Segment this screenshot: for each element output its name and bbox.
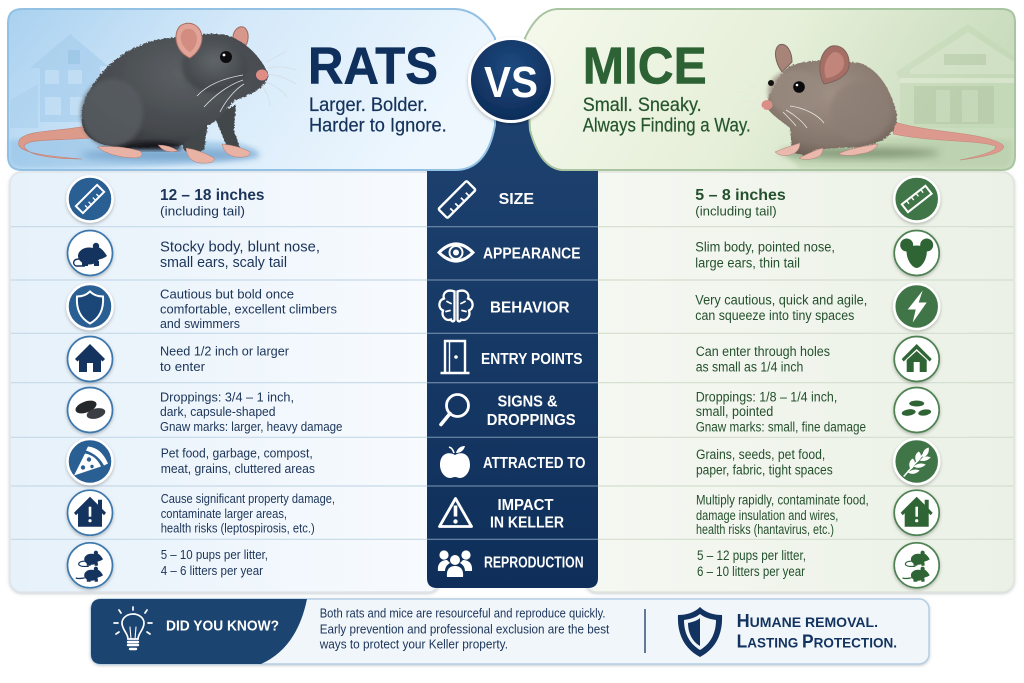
mouse tail <box>893 122 1004 160</box>
mice row text: entry points: as small as 1/4 inch <box>696 360 803 375</box>
mouse whiskers <box>730 81 824 128</box>
rats row text: appearance: small ears, scaly tail <box>160 255 287 271</box>
rats row text: attracted to: meat, grains, cluttered areas <box>161 461 315 476</box>
mice row text: droppings: small, pointed <box>696 404 773 419</box>
rats row text: attracted to: Pet food, garbage, compost, <box>161 446 313 461</box>
icon: house badge mice <box>894 336 939 382</box>
rats title: RATS <box>308 38 438 96</box>
icon: lightning badge <box>894 284 939 329</box>
mice row text: behavior <box>695 292 867 323</box>
rats tagline: Harder to Ignore. <box>309 116 447 137</box>
header panel: mice <box>525 9 1015 170</box>
icon: droppings badge mice <box>894 388 939 432</box>
icon: two mice badge <box>894 543 939 588</box>
mice row text: behavior: Very cautious, quick and agile, <box>695 292 867 307</box>
humane removal slogan <box>737 611 897 651</box>
rats row text: entry points: to enter <box>160 359 206 374</box>
mice title: MICE <box>583 38 707 96</box>
category label: impact in keller: IMPACT <box>498 497 554 514</box>
mice row text: droppings <box>696 390 866 435</box>
faded house <box>10 34 108 128</box>
mouse ear <box>820 46 849 84</box>
banner dark tab <box>91 599 307 664</box>
rats tagline: Larger. Bolder. <box>309 95 428 116</box>
category label: reproduction: REPRODUCTION <box>484 554 584 571</box>
mouse far ear <box>775 44 792 72</box>
table panel: rats side <box>10 172 440 592</box>
icon: eye (center) <box>439 244 473 261</box>
mice row text: impact: Multiply rapidly, contaminate food, <box>696 492 869 507</box>
mouse feet <box>775 143 878 160</box>
mouse body <box>765 60 897 156</box>
rats row text: impact: health risks (leptospirosis, etc.) <box>161 521 315 536</box>
rats row text: appearance: Stocky body, blunt nose, <box>160 240 320 256</box>
did you know paragraph: Early prevention and professional exclusion are the best <box>320 622 610 636</box>
mice row text: droppings: Droppings: 1/8 – 1/4 inch, <box>696 390 837 405</box>
did you know paragraph: ways to protect your Keller property. <box>319 637 508 651</box>
humane removal slogan: LASTING PROTECTION. <box>737 631 897 651</box>
rats row text: droppings <box>160 390 342 434</box>
mice tagline: Always Finding a Way. <box>583 116 751 137</box>
rats row text: droppings: Gnaw marks: larger, heavy damage <box>160 419 342 434</box>
rats row text: behavior: and swimmers <box>160 316 240 331</box>
icon: light bulb <box>114 607 152 649</box>
mouse illustration <box>730 44 1004 160</box>
icon: warning (center) <box>440 498 472 526</box>
icon: apple (center) <box>440 446 470 478</box>
humane removal slogan: HUMANE REMOVAL. <box>737 611 878 631</box>
icon: two rats badge <box>68 543 112 588</box>
mice row text: attracted to <box>696 447 833 478</box>
category label: entry points: ENTRY POINTS <box>481 351 583 368</box>
icon: brain (center) <box>439 291 473 321</box>
icon: ruler (center) <box>438 181 476 218</box>
mice row text: appearance: Slim body, pointed nose, <box>695 240 835 255</box>
rat whiskers <box>197 52 296 112</box>
icon: magnifier (center) <box>441 394 468 424</box>
rat tail <box>19 125 90 159</box>
rats row text: size <box>160 187 264 218</box>
rats row text: impact: Cause significant property damage, <box>161 491 335 506</box>
category label: signs and droppings: SIGNS & <box>498 394 558 411</box>
rats row text: reproduction: 5 – 10 pups per litter, <box>161 547 268 562</box>
icon: shield <box>678 607 722 657</box>
mice row text: impact: health risks (hantavirus, etc.) <box>696 522 834 537</box>
did you know heading: DID YOU KNOW? <box>166 618 279 635</box>
mice row text: size: (including tail) <box>695 204 777 218</box>
mice row text: droppings: Gnaw marks: small, fine damage <box>696 420 866 435</box>
rats tagline <box>309 95 447 137</box>
rat illustration <box>19 23 296 163</box>
rats row text: size: (including tail) <box>160 204 245 218</box>
rats row text: size: 12 – 18 inches <box>160 187 264 204</box>
category label: impact in keller: IN KELLER <box>490 515 564 532</box>
mice row text: appearance <box>695 240 835 270</box>
header panel: rats <box>8 9 495 170</box>
rat body <box>82 34 268 148</box>
rats row text: entry points <box>160 344 290 374</box>
mouse nose <box>762 100 772 110</box>
mice row text: entry points: Can enter through holes <box>696 344 830 359</box>
mouse eye <box>793 81 805 93</box>
mice row text: reproduction: 5 – 12 pups per litter, <box>697 548 806 563</box>
rats row text: impact: contaminate larger areas, <box>161 506 287 521</box>
mice row text: attracted to: Grains, seeds, pet food, <box>696 447 825 462</box>
faded house <box>896 24 1014 128</box>
did you know paragraph <box>319 607 610 651</box>
mice row text: size: 5 – 8 inches <box>695 187 786 204</box>
category label: signs and droppings: DROPPINGS <box>487 412 576 429</box>
icon: shield badge <box>68 284 112 329</box>
VS badge <box>470 38 552 122</box>
icon: wheat badge <box>894 439 939 484</box>
mice row text: entry points <box>696 344 830 375</box>
rats row text: entry points: Need 1/2 inch or larger <box>160 344 290 359</box>
icon: droppings badge rats <box>68 388 112 432</box>
rats row text: droppings: dark, capsule-shaped <box>160 404 276 419</box>
icon: house alert badge rats <box>68 490 112 535</box>
rats row text: impact <box>161 491 335 536</box>
table panel: mice side <box>585 172 1014 592</box>
mice row text: size <box>695 187 786 218</box>
icon: pizza badge <box>68 439 112 484</box>
category label: impact in keller <box>490 497 564 532</box>
category label: signs and droppings <box>487 394 576 429</box>
category label: appearance: APPEARANCE <box>483 245 581 262</box>
icon: people (center) <box>438 550 472 577</box>
rats row text: behavior: comfortable, excellent climbers <box>160 302 337 317</box>
mice row text: impact <box>696 492 869 537</box>
icon: rat ruler badge <box>68 176 112 222</box>
mice row text: reproduction <box>697 548 806 579</box>
rats row text: appearance <box>160 240 320 271</box>
mice row text: impact: damage insulation and wires, <box>696 508 838 523</box>
icon: house badge rats <box>68 336 112 382</box>
rat eye <box>220 51 232 63</box>
mice tagline: Small. Sneaky. <box>583 95 702 116</box>
category label: size: SIZE <box>499 191 534 208</box>
did you know paragraph: Both rats and mice are resourceful and reproduce quickly. <box>320 607 606 621</box>
mice row text: reproduction: 6 – 10 litters per year <box>697 564 805 579</box>
icon: rat silhouette badge <box>68 230 112 276</box>
icon: house alert badge mice <box>894 490 939 535</box>
rat far ear <box>233 27 248 45</box>
mice tagline <box>583 95 751 137</box>
rat legs <box>172 105 240 156</box>
rats row text: droppings: Droppings: 3/4 – 1 inch, <box>160 390 294 405</box>
rats row text: behavior <box>160 287 337 331</box>
rat nose <box>256 70 268 80</box>
category label: behavior: BEHAVIOR <box>490 299 570 316</box>
did you know banner <box>91 599 929 664</box>
icon: mouse head badge <box>894 230 939 276</box>
rats row text: attracted to <box>161 446 315 476</box>
mice row text: attracted to: paper, fabric, tight spaces <box>696 463 833 478</box>
rat feet <box>97 144 250 163</box>
VS badge: VS <box>484 58 538 107</box>
rats row text: reproduction <box>161 547 268 578</box>
rat ear <box>176 23 202 58</box>
mice row text: behavior: can squeeze into tiny spaces <box>695 308 855 323</box>
center category column <box>427 100 598 588</box>
mice row text: appearance: large ears, thin tail <box>695 255 800 270</box>
category label: attracted to: ATTRACTED TO <box>483 455 586 472</box>
rats row text: behavior: Cautious but bold once <box>160 287 294 302</box>
rats row text: reproduction: 4 – 6 litters per year <box>161 563 264 578</box>
icon: mouse ruler badge <box>894 176 939 222</box>
icon: door (center) <box>440 341 470 373</box>
